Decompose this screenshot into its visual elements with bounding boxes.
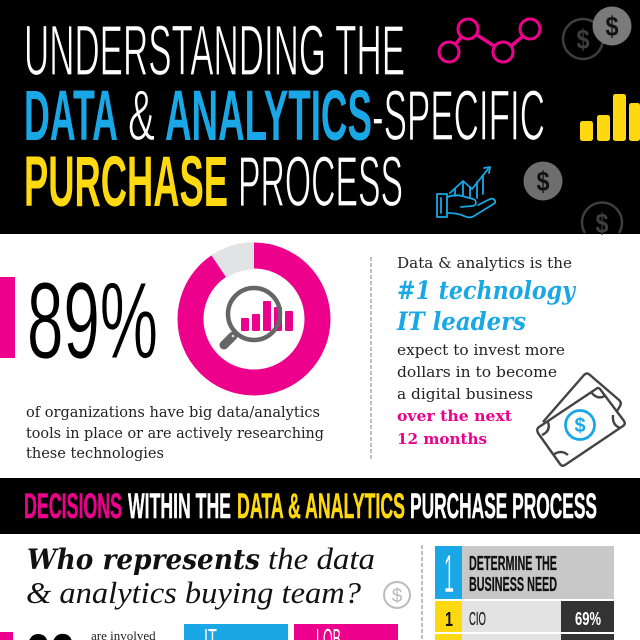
icon: magnifier with bars xyxy=(224,288,293,345)
title: ANALYTICS xyxy=(165,77,372,156)
banner heading: DATA & ANALYTICS xyxy=(237,487,405,526)
stat description: of organizations have big data/analytics xyxy=(26,405,320,421)
icon: dollar coin xyxy=(384,582,410,608)
highlighted heading: #1 technology xyxy=(397,276,576,305)
big number: 89% xyxy=(27,260,158,382)
row: CIO: CIO xyxy=(469,609,486,629)
panel: section banner xyxy=(0,478,640,534)
icon: dollar coin: $ xyxy=(392,586,403,607)
icon: outline dollar coin: $ xyxy=(576,24,590,55)
heading: Who represents xyxy=(27,543,260,576)
title xyxy=(24,12,545,222)
LOB column head xyxy=(294,624,398,640)
panel: buying team xyxy=(0,541,410,640)
divider xyxy=(421,545,423,640)
icon: yellow bars xyxy=(580,94,640,141)
title: PROCESS xyxy=(238,143,403,222)
step header: DETERMINE THE xyxy=(469,553,557,575)
icon: outline dollar coin bottom xyxy=(582,202,622,239)
accent bar xyxy=(0,277,15,358)
heading: the data xyxy=(268,541,375,576)
step header: BUSINESS NEED xyxy=(469,574,557,596)
heading: & analytics buying team? xyxy=(26,575,362,610)
icon: money bills: $ xyxy=(574,415,586,437)
panel: header xyxy=(0,0,640,239)
icon: outline dollar coin bottom: $ xyxy=(596,208,609,239)
IT column head xyxy=(184,624,288,640)
panel: process table xyxy=(435,544,614,640)
body text middle: dollars in to become xyxy=(397,365,557,381)
stat description: these technologies xyxy=(26,446,164,462)
step header: 1 xyxy=(444,544,454,604)
body text middle: a digital business xyxy=(397,387,533,403)
icon: outline dollar coin xyxy=(563,19,603,59)
highlighted heading: IT leaders xyxy=(396,307,526,336)
stat description: tools in place or are actively researching xyxy=(26,426,324,442)
pink highlight text xyxy=(397,407,512,448)
accent bar xyxy=(0,632,13,640)
divider xyxy=(370,257,372,461)
heading xyxy=(26,541,375,610)
icon: pink line chart xyxy=(439,19,540,62)
panel: 89 percent stat xyxy=(0,242,324,462)
body text middle: expect to invest more xyxy=(397,343,565,359)
title: PURCHASE xyxy=(24,143,228,222)
stat description xyxy=(26,405,324,462)
row: CIO xyxy=(435,601,614,632)
icon: filled dollar coin xyxy=(592,6,632,46)
body text top: Data & analytics is the xyxy=(397,256,572,272)
row: CIO: 1 xyxy=(445,609,453,631)
icon: hand with rising chart xyxy=(437,167,495,218)
pink highlight text: over the next xyxy=(397,407,512,425)
icon: filled dollar coin: $ xyxy=(606,11,619,42)
title: & xyxy=(128,77,155,156)
banner heading: DECISIONS xyxy=(24,487,122,526)
icon: money bills xyxy=(537,374,625,466)
row: CIO: 69% xyxy=(575,609,601,629)
step header xyxy=(435,544,614,604)
panel: number one technology xyxy=(396,256,625,466)
title: DATA xyxy=(24,77,118,156)
pink highlight text: 12 months xyxy=(397,430,487,448)
highlighted heading xyxy=(396,276,576,336)
body text middle xyxy=(397,343,565,403)
donut chart xyxy=(190,242,318,382)
banner heading: WITHIN THE xyxy=(128,487,231,526)
icon: filled dollar coin lower: $ xyxy=(536,166,550,197)
row: next (cropped) xyxy=(435,634,614,640)
banner heading xyxy=(24,487,597,526)
icon: filled dollar coin lower xyxy=(524,162,562,200)
